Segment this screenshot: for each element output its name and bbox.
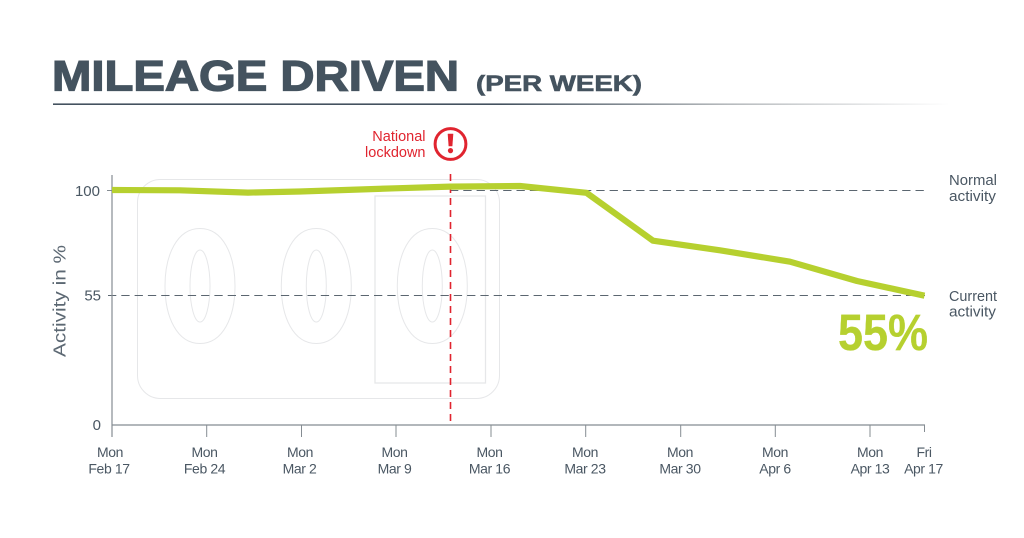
x axis labels	[88, 444, 944, 476]
x axis labels: Mon	[762, 444, 788, 460]
x axis labels: Mar 2	[283, 460, 317, 476]
title: (PER WEEK)	[476, 71, 642, 96]
x axis labels: Mar 16	[469, 460, 511, 476]
x axis labels: Mon	[572, 444, 598, 460]
x axis labels: Feb 17	[88, 460, 130, 476]
watermark: faint 000 outline	[138, 180, 500, 398]
callout: national lockdown: lockdown	[365, 145, 426, 161]
x axis labels: Mon	[476, 444, 503, 460]
x axis labels: Mon	[191, 444, 218, 460]
x axis labels: Mon	[667, 444, 693, 460]
label: normal activity	[949, 173, 997, 205]
y axis labels: 0	[93, 417, 101, 434]
chart axes	[107, 175, 925, 437]
y axis labels	[75, 183, 101, 434]
big value: 55%: 55%	[838, 304, 928, 361]
label: current activity	[949, 289, 997, 321]
title: MILEAGE DRIVEN	[52, 52, 459, 100]
callout: national lockdown	[365, 129, 466, 161]
x axis labels: Fri	[916, 444, 932, 460]
x axis labels: Mar 23	[564, 460, 606, 476]
label: normal activity: Normal	[949, 173, 997, 189]
x axis labels: Mar 9	[378, 460, 412, 476]
y axis labels: 100	[75, 183, 100, 200]
x axis labels: Mon	[857, 444, 883, 460]
y axis labels: 55	[84, 288, 101, 304]
x axis labels: Apr 13	[851, 460, 890, 476]
x axis labels: Apr 6	[759, 460, 791, 476]
lockdown marker line	[450, 174, 452, 425]
data line: mileage activity	[112, 186, 924, 296]
label: current activity: activity	[949, 305, 997, 321]
x axis labels: Mar 30	[659, 460, 701, 476]
x axis labels: Mon	[381, 444, 408, 460]
x axis labels: Mon	[97, 444, 123, 460]
icon: exclamation alert	[435, 129, 466, 159]
x axis labels: Apr 17	[904, 460, 944, 476]
label: normal activity: activity	[949, 189, 997, 205]
x axis labels: Feb 24	[184, 460, 226, 476]
label: current activity: Current	[949, 289, 997, 305]
callout: national lockdown: National	[372, 129, 426, 145]
reference lines: normal and current activity	[108, 190, 925, 296]
x axis labels: Mon	[287, 444, 313, 460]
y axis title: Activity in %	[50, 245, 70, 357]
title	[52, 52, 642, 100]
